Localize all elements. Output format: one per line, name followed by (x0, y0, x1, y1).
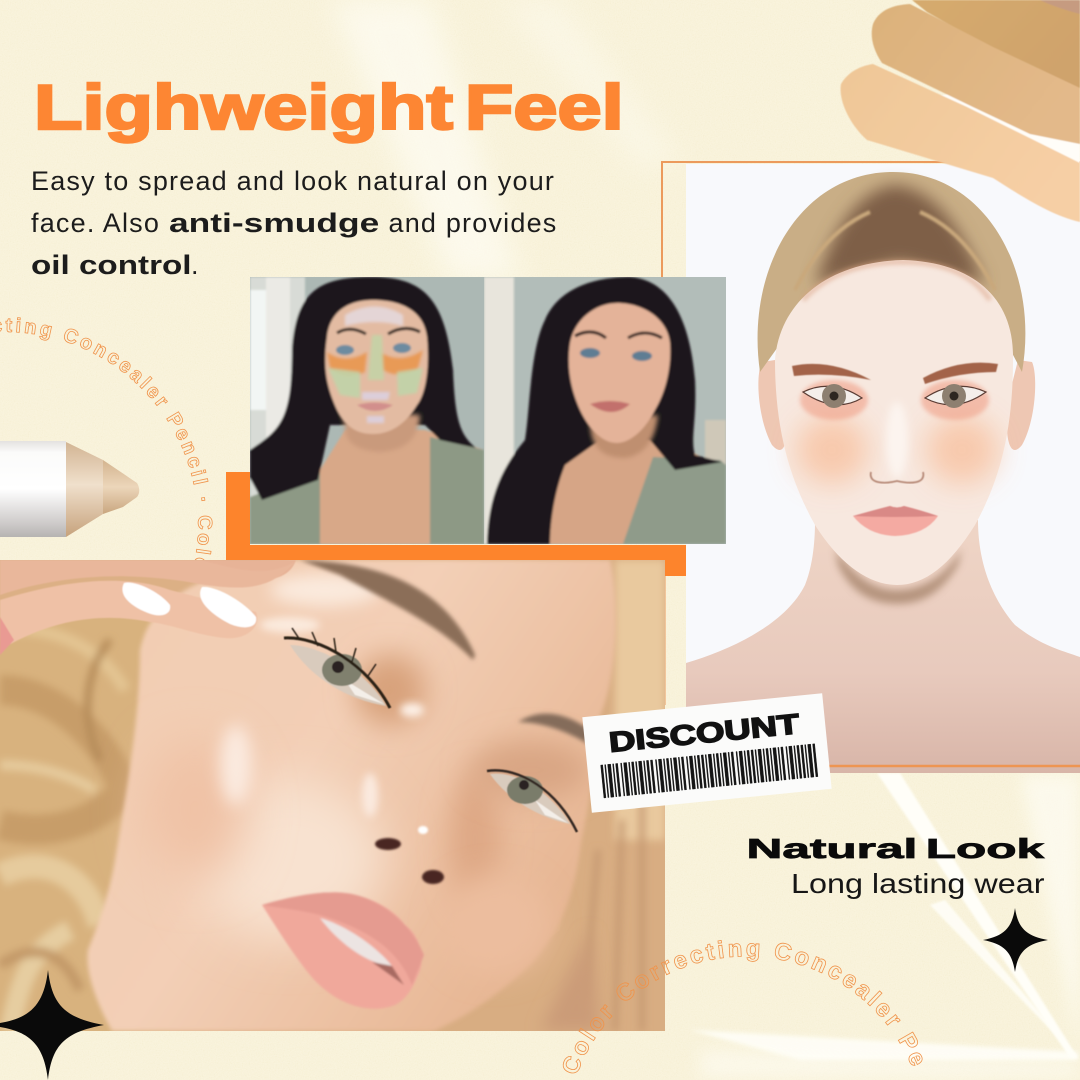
cheek blush (796, 416, 868, 484)
caption heading: Natural Look (746, 833, 1044, 864)
portrait lips (853, 506, 938, 536)
face skin (87, 560, 616, 1031)
caption sub-line: Long lasting wear (790, 868, 1044, 899)
orange block behind before-after photo (226, 472, 686, 576)
orange line under right portrait (825, 765, 1080, 767)
body copy (31, 166, 558, 280)
barcode (601, 744, 818, 798)
sparkle bottom-left (0, 970, 104, 1080)
body copy: . (191, 250, 200, 280)
lips (262, 892, 424, 1009)
right portrait photo (686, 164, 1080, 773)
title: Lighweight Feel (34, 73, 624, 143)
nostrils (375, 838, 444, 884)
portrait neck and shoulders (686, 520, 1080, 773)
after photo (484, 277, 726, 544)
portrait ears (758, 360, 787, 450)
portrait nose (871, 402, 923, 483)
chin shadow (835, 548, 962, 604)
portrait eyebrows (792, 364, 871, 380)
eyebrow right (518, 714, 590, 745)
main close-up beauty photo (0, 560, 665, 1031)
body copy: oil control (31, 250, 192, 280)
discount ticket (582, 693, 832, 813)
eye right (487, 770, 577, 832)
concealer patches (327, 306, 423, 423)
portrait hair (758, 172, 1025, 372)
curved text bottom: Color Correcting Concealer Pe (562, 940, 923, 1074)
face lights and shadows (145, 574, 590, 975)
body copy: anti-smudge (169, 208, 379, 238)
background light rays (330, 0, 1080, 1078)
orange frame behind right portrait (662, 162, 1080, 705)
portrait eyes (800, 380, 989, 420)
caption: natural look (746, 833, 1046, 899)
right hair (542, 560, 665, 1031)
left hair (0, 627, 130, 1031)
sparkle right (983, 908, 1048, 972)
before photo (250, 277, 484, 544)
fingers (0, 560, 296, 655)
eyebrow left (300, 560, 475, 660)
pencil illustration (0, 441, 139, 537)
before and after photo (250, 277, 726, 544)
foundation swatches (841, 0, 1080, 222)
discount label: DISCOUNT (608, 708, 801, 758)
body copy: face. Also and provides (31, 208, 558, 238)
body copy: Easy to spread and look natural on your (31, 166, 555, 196)
portrait face (775, 260, 1013, 585)
eye left (284, 628, 390, 708)
